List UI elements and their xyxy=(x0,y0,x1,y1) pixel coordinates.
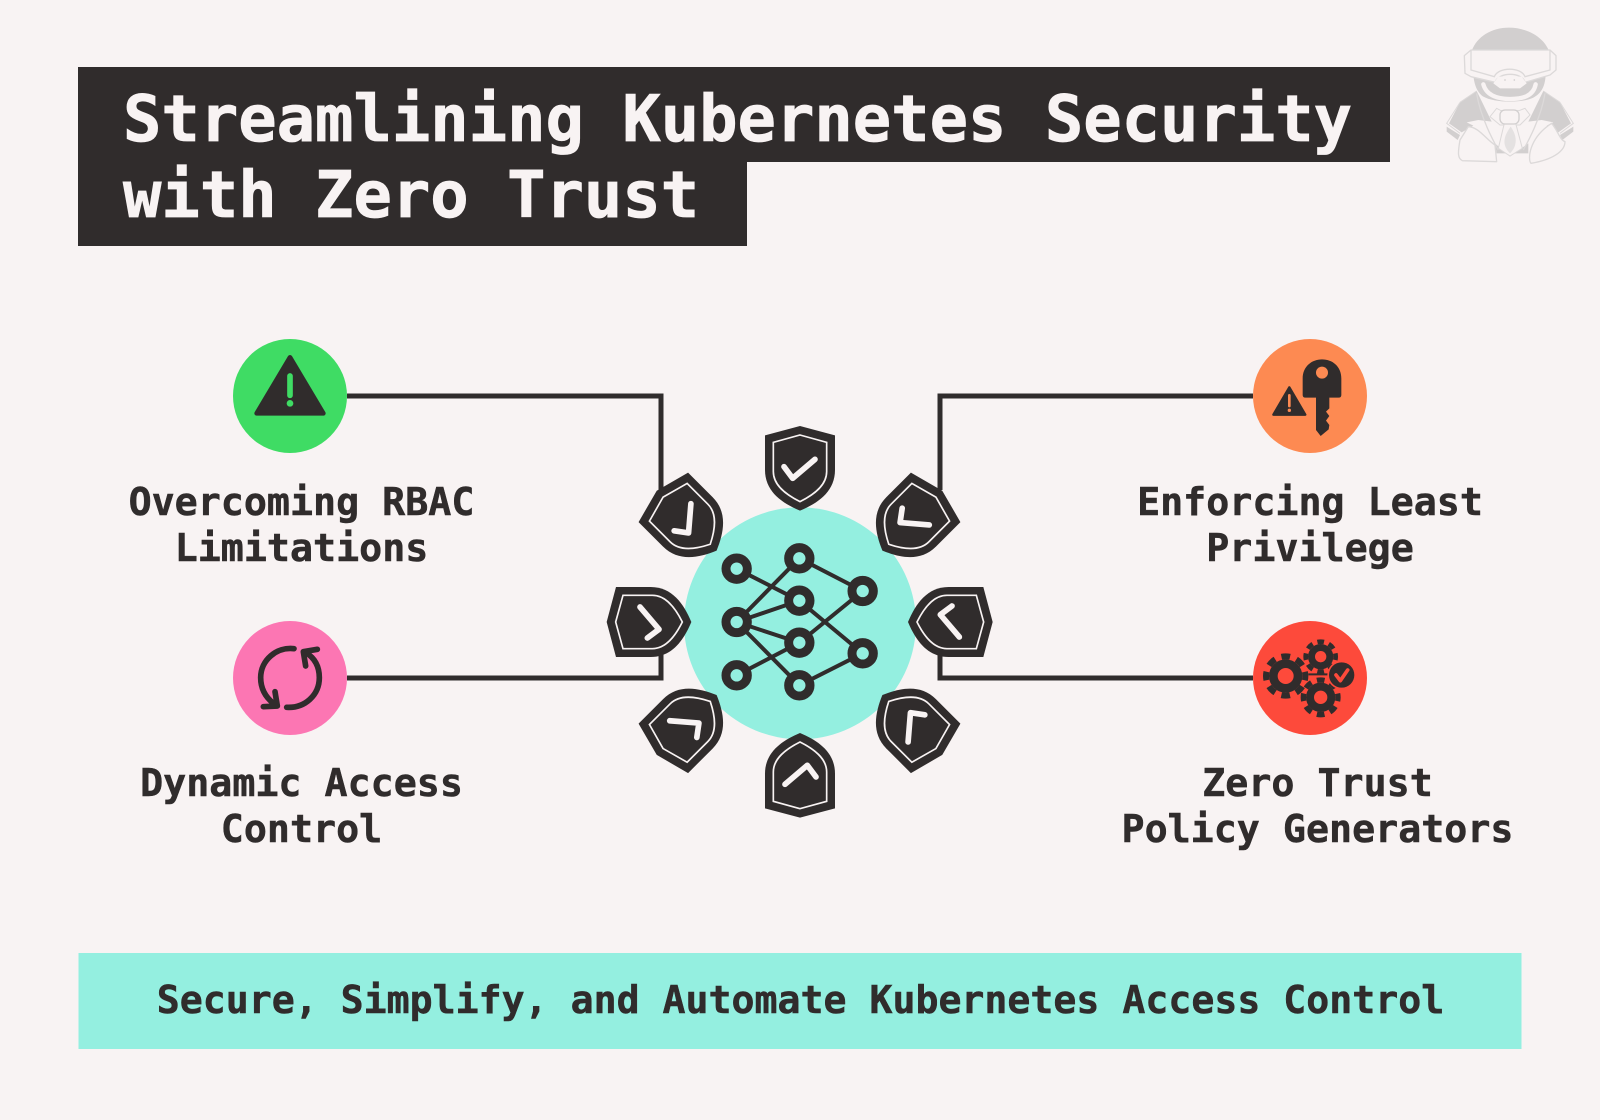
shield: left xyxy=(607,587,691,657)
hub circle xyxy=(684,507,916,739)
connector: RBAC to centre xyxy=(347,396,661,490)
shield: top right xyxy=(858,466,967,575)
icon: refresh in pink circle xyxy=(233,621,347,735)
icon: key and warning in orange circle xyxy=(1253,339,1367,453)
title text line 2: with Zero Trust xyxy=(123,159,699,233)
icon: warning in green circle xyxy=(233,339,347,453)
label: Dynamic Access Control: Dynamic Access xyxy=(140,761,463,806)
label: Zero Trust Policy Generators xyxy=(1122,761,1513,852)
label: Enforcing Least Privilege: Enforcing Least xyxy=(1137,480,1483,525)
label: Zero Trust Policy Generators: Policy Generators xyxy=(1122,807,1513,852)
label: Enforcing Least Privilege: Privilege xyxy=(1206,526,1414,571)
title text line 1: Streamlining Kubernetes Security xyxy=(123,83,1352,157)
shield: bottom right xyxy=(858,670,967,780)
label: Overcoming RBAC Limitations xyxy=(129,480,474,571)
shield: right xyxy=(908,587,993,657)
title banner xyxy=(78,67,1390,246)
label: Overcoming RBAC Limitations: Overcoming RBAC xyxy=(129,480,474,525)
connector: access control to centre xyxy=(347,650,661,678)
label: Dynamic Access Control: Control xyxy=(221,807,382,852)
bottom banner: Secure, Simplify, and Automate Kubernetes Access Control xyxy=(157,979,1444,1023)
label: Zero Trust Policy Generators: Zero Trust xyxy=(1202,761,1433,806)
connector: policy generators to centre xyxy=(940,650,1253,678)
shield: top left xyxy=(632,466,741,575)
central hub: network and shields xyxy=(607,426,993,818)
connector: least privilege to centre xyxy=(940,396,1253,490)
shield: bottom left xyxy=(632,670,741,780)
neural network icon xyxy=(726,548,873,696)
shield: top xyxy=(765,426,835,511)
shield: bottom xyxy=(765,733,835,818)
label: Overcoming RBAC Limitations: Limitations xyxy=(175,526,428,571)
watermark: penguin mascot xyxy=(1447,28,1573,163)
label: Enforcing Least Privilege xyxy=(1137,480,1483,571)
label: Dynamic Access Control xyxy=(140,761,463,852)
icon: gears and check in red circle xyxy=(1253,621,1367,735)
bottom banner xyxy=(78,953,1522,1049)
